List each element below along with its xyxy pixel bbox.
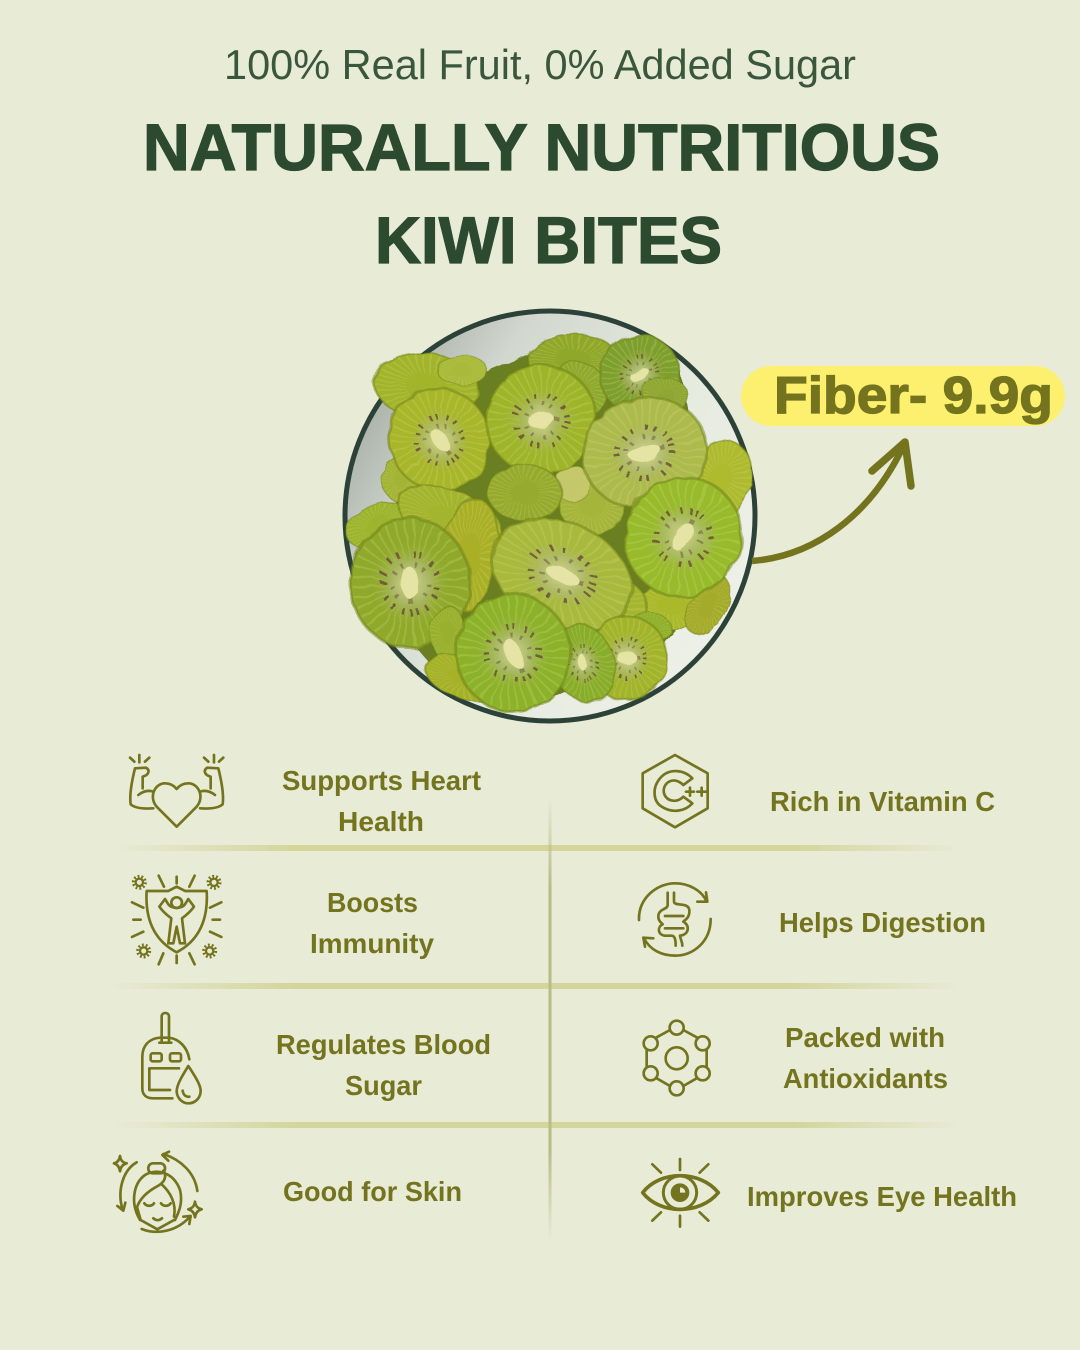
label: packed with antioxidants xyxy=(783,1022,948,1094)
label: packed with antioxidants: Packed with xyxy=(785,1022,945,1053)
icon: digestion xyxy=(639,883,711,956)
icon: shield with figure xyxy=(132,876,221,964)
plate xyxy=(345,311,755,721)
fiber callout: Fiber- 9.9g xyxy=(774,367,1053,425)
title: KIWI BITES xyxy=(375,203,722,277)
dividers xyxy=(108,798,960,1240)
icon: glucose meter xyxy=(142,1013,201,1103)
icon: antioxidant molecule xyxy=(644,1021,710,1095)
label: regulates blood sugar xyxy=(276,1029,491,1101)
title xyxy=(143,110,940,277)
icon: eye xyxy=(643,1159,718,1227)
label: supports heart health xyxy=(282,765,481,837)
label: regulates blood sugar: Regulates Blood xyxy=(276,1029,491,1060)
label: packed with antioxidants: Antioxidants xyxy=(783,1063,948,1094)
label: rich in vitamin c: Rich in Vitamin C xyxy=(770,786,995,817)
label: regulates blood sugar: Sugar xyxy=(345,1070,422,1101)
label: supports heart health: Health xyxy=(338,806,424,837)
kiwi bowl photo xyxy=(339,311,763,731)
label: boosts immunity: Immunity xyxy=(310,928,434,959)
arrow xyxy=(752,442,911,561)
icon: heart with muscles xyxy=(130,755,223,827)
label: improves eye health: Improves Eye Health xyxy=(747,1181,1017,1212)
label: supports heart health: Supports Heart xyxy=(282,765,481,796)
subtitle: 100% Real Fruit, 0% Added Sugar xyxy=(224,41,856,88)
label: boosts immunity: Boosts xyxy=(327,887,418,918)
dried kiwi slices xyxy=(339,322,763,731)
label: good for skin: Good for Skin xyxy=(283,1176,462,1207)
icon: face with arrows xyxy=(114,1152,202,1232)
label: helps digestion: Helps Digestion xyxy=(779,907,986,938)
title: NATURALLY NUTRITIOUS xyxy=(143,110,940,184)
icon: vitamin C hexagon xyxy=(643,755,708,827)
label: boosts immunity xyxy=(310,887,434,959)
